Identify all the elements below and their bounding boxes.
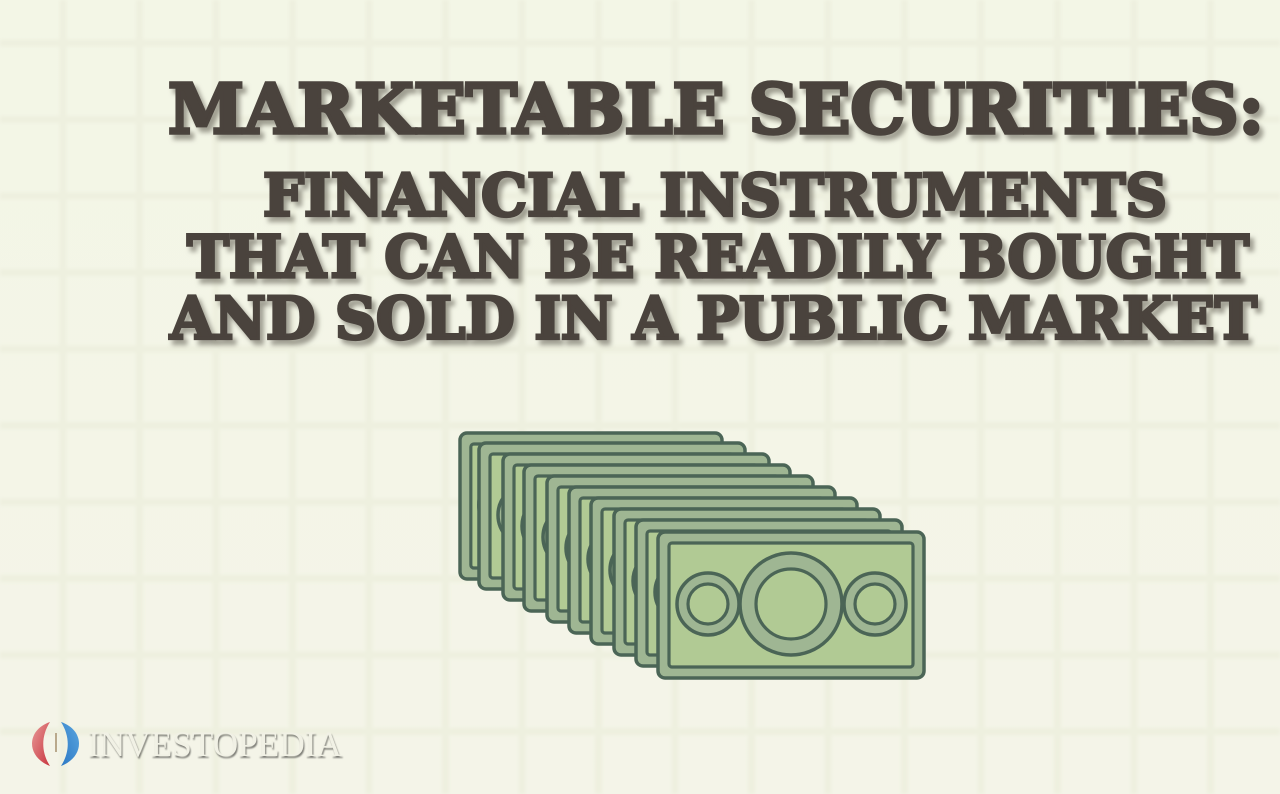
- title: marketable securities: MARKETABLE SECURITIES:: [168, 70, 1264, 150]
- subtitle line 3: AND SOLD IN A PUBLIC MARKET: [169, 284, 1257, 352]
- logo wordmark: INVESTOPEDIA: [88, 724, 342, 764]
- logo: Investopedia: [32, 722, 342, 766]
- subtitle line 2: THAT CAN BE READILY BOUGHT: [187, 223, 1249, 291]
- subtitle line 1: FINANCIAL INSTRUMENTS: [263, 162, 1167, 230]
- icon: logo crescents: [32, 722, 79, 766]
- subtitle: definition: [169, 162, 1257, 352]
- icon: stack of banknotes: [460, 433, 924, 678]
